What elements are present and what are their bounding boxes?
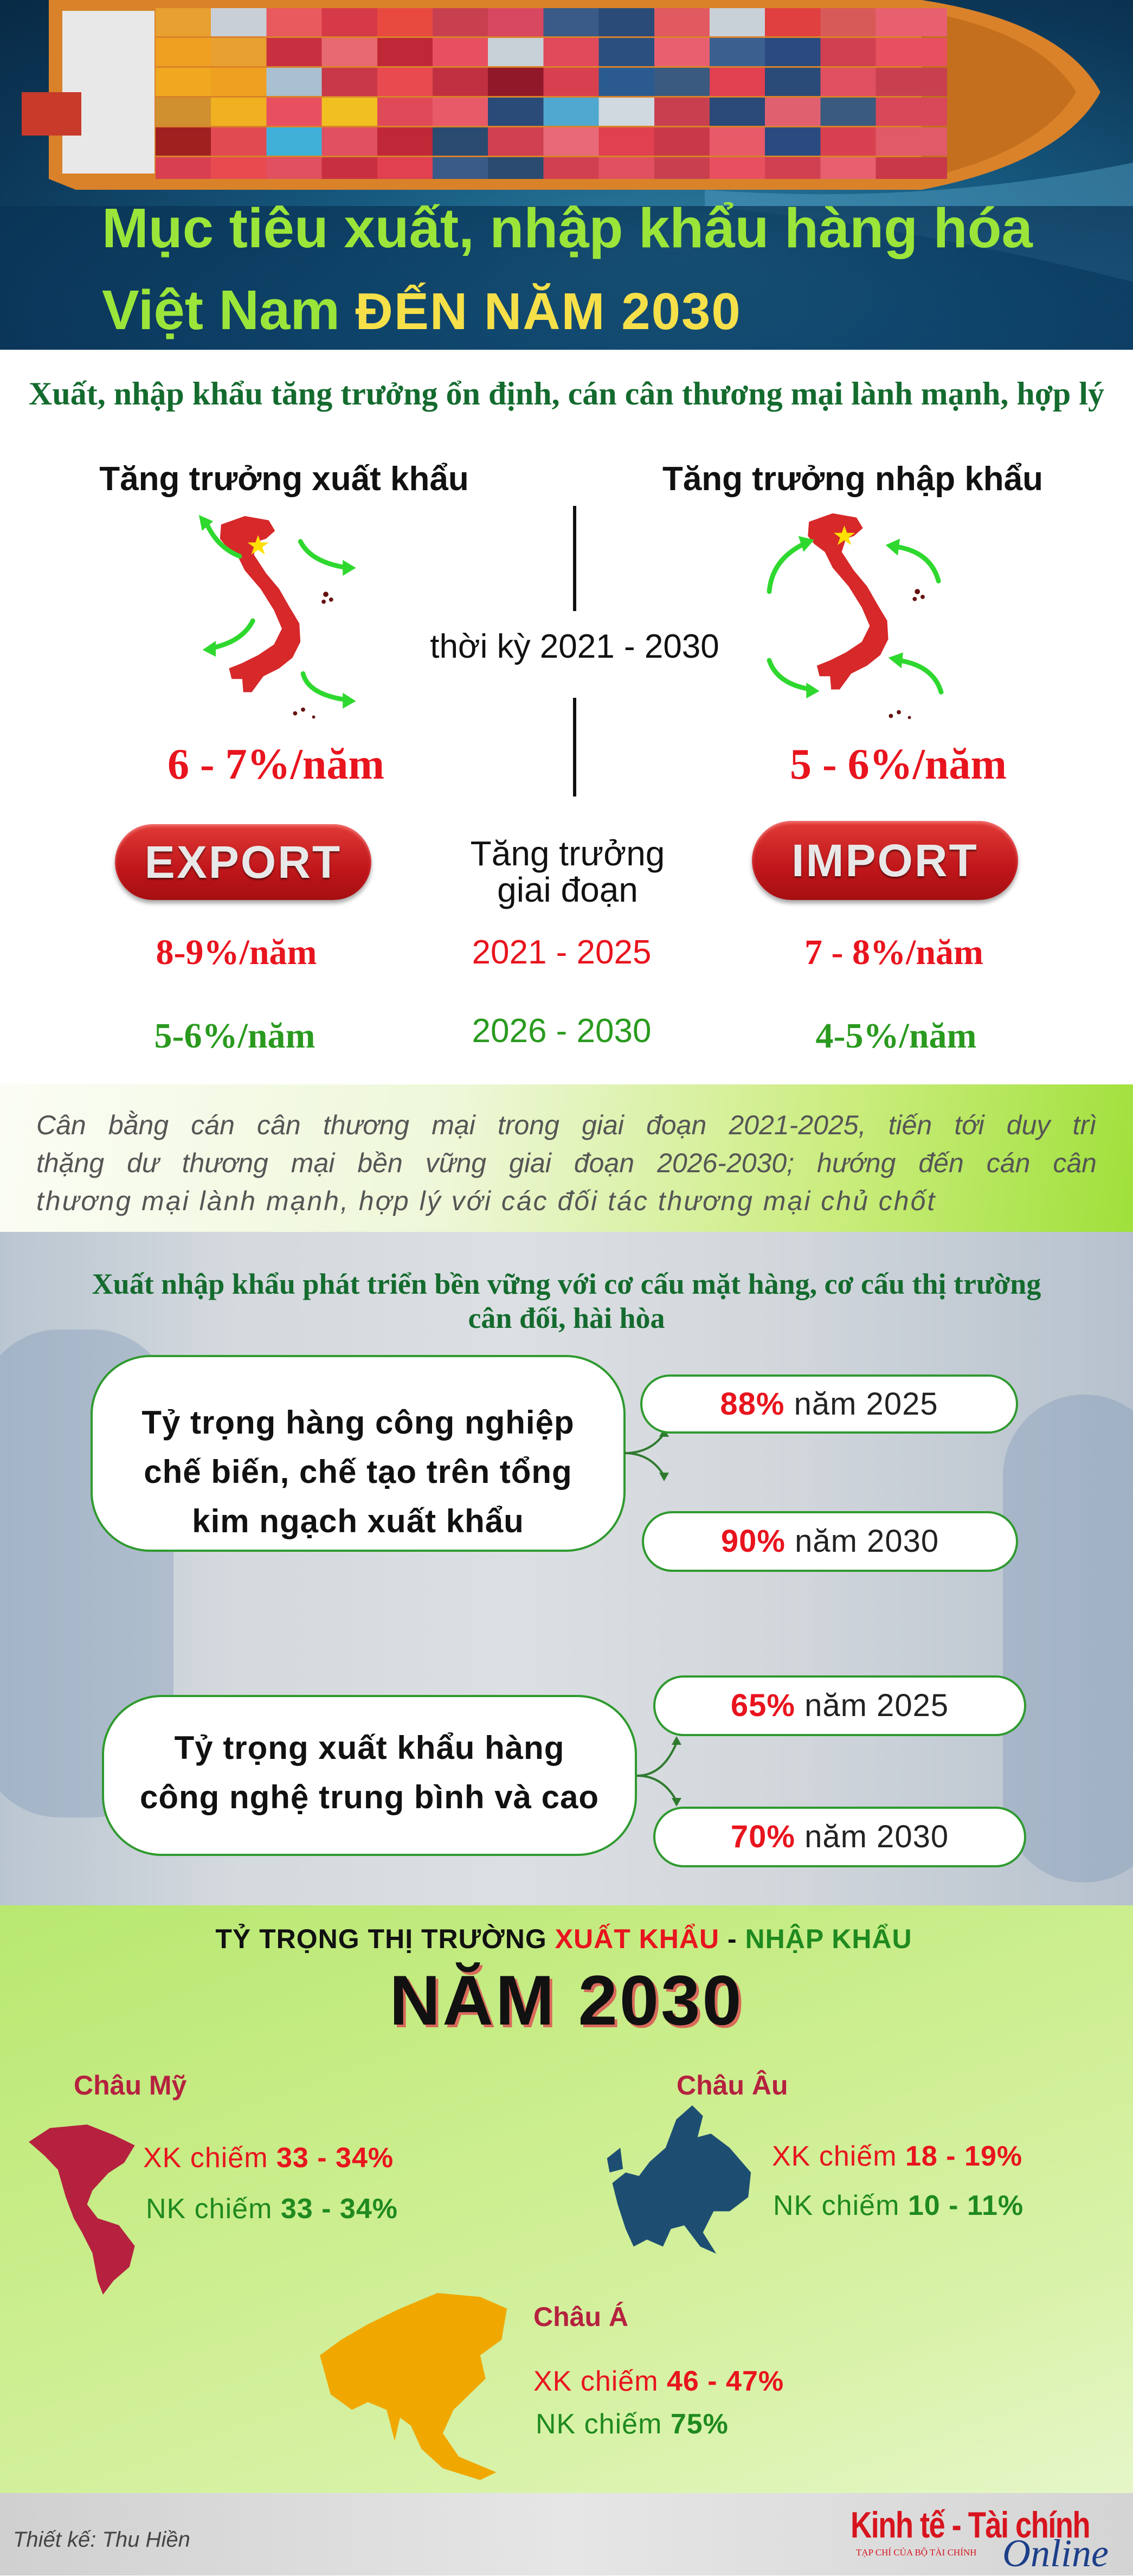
ship hull [22,0,1133,282]
logo [851,2504,1109,2575]
pill: 90%: 90% năm 2030 [721,1524,939,1559]
phase label: giai đoạn [497,870,638,909]
Asia [320,2293,784,2480]
subtitle: Xuất, nhập khẩu tăng trưởng ổn định, cán cân thương mại lành mạnh, hợp lý [29,376,1104,412]
title [102,197,1033,341]
box: processed industry share [91,1355,626,1552]
Americas [29,2070,398,2295]
phase label: Tăng trưởng [471,834,665,873]
pill: 90% [642,1511,1018,1572]
heading: cân đối, hài hòa [468,1302,665,1334]
band: trade balance text: Cân bằng cán cân thương mại trong giai đoạn 2021-2025, tiến tới duy trì [36,1110,1097,1140]
Europe: XK chiếm 18 - 19% [772,2141,1022,2172]
arrows fork 2 [637,1736,681,1807]
pill: 70%: 70% năm 2030 [731,1819,949,1854]
box: processed industry share: kim ngạch xuất khẩu [192,1503,524,1539]
divider line bottom [573,698,576,796]
credit: Thiết kế: Thu Hiền [13,2528,190,2552]
phase 2026-2030 row: 5-6%/năm [154,1016,316,1056]
pill: 88%: 88% năm 2025 [720,1386,938,1422]
heading: Xuất nhập khẩu phát triển bền vững với cơ cấu mặt hàng, cơ cấu thị trường [92,1268,1041,1300]
band: trade balance text: thương mại lành mạnh, hợp lý với các đối tác thương mại chủ chốt [36,1186,936,1216]
phase 2026-2030 row: 4-5%/năm [815,1016,977,1056]
pill: 88% [640,1374,1018,1434]
band: trade balance text [0,1084,1133,1232]
box: processed industry share: chế biến, chế tạo trên tổng [144,1454,572,1490]
pill: 65% [653,1675,1026,1736]
import rate: 5 - 6%/năm [790,741,1007,788]
button: import: IMPORT [791,835,978,886]
phase 2026-2030 row [154,1012,977,1056]
export rate: 6 - 7%/năm [168,741,384,788]
big year: NĂM 2030 [389,1961,744,2040]
box: processed industry share: Tỷ trọng hàng công nghiệp [141,1404,575,1441]
button: export [115,824,371,900]
period text: thời kỳ 2021 - 2030 [430,628,719,665]
band: trade balance text: thặng dư thương mại bền vững giai đoạn 2026-2030; hướng đến cán cân [36,1148,1097,1178]
Europe: Châu Âu [677,2070,788,2100]
icon: vietnam map import [767,513,943,719]
pill: 70% [653,1807,1026,1867]
logo: Online [1002,2532,1109,2575]
arrows fork 1 [625,1432,669,1481]
export growth heading: Tăng trưởng xuất khẩu [99,460,469,498]
footer [0,2493,1133,2575]
title: Việt Nam ĐẾN NĂM 2030 [102,279,742,341]
heading [92,1268,1041,1334]
icon: americas map [29,2124,135,2295]
logo: Kinh tế - Tài chính [851,2504,1090,2546]
Americas: Châu Mỹ [74,2070,186,2100]
icon: vietnam map export [198,515,356,719]
box: tech export share [102,1695,637,1856]
phase 2021-2025 row [156,933,983,972]
button: export: EXPORT [145,837,342,888]
box: tech export share: công nghệ trung bình và cao [140,1779,599,1815]
Asia: XK chiếm 46 - 47% [533,2366,784,2397]
Asia: Châu Á [533,2302,628,2332]
title: Mục tiêu xuất, nhập khẩu hàng hóa [102,197,1033,259]
Americas: NK chiếm 33 - 34% [146,2193,398,2225]
phase label [471,834,665,909]
panel: market share 2030 [0,1905,1133,2493]
button: import [752,821,1018,900]
header: ship image [0,0,1133,350]
phase 2021-2025 row: 8-9%/năm [156,933,317,972]
icon: europe map [607,2105,751,2253]
box: tech export share: Tỷ trọng xuất khẩu hàng [175,1730,564,1766]
pill: 65%: 65% năm 2025 [731,1688,949,1723]
Asia: NK chiếm 75% [536,2408,729,2440]
divider line top [573,506,576,611]
icon: asia map [320,2293,507,2480]
logo: TẠP CHÍ CỦA BỘ TÀI CHÍNH [856,2547,976,2558]
Europe: NK chiếm 10 - 11% [773,2190,1023,2221]
heading: TỶ TRỌNG THỊ TRƯỜNG XUẤT KHẨU - NHẬP KHẨU [215,1924,912,1954]
panel: factory structure [0,1232,1133,1905]
Americas: XK chiếm 33 - 34% [143,2142,394,2174]
phase 2026-2030 row: 2026 - 2030 [472,1012,651,1050]
phase 2021-2025 row: 2021 - 2025 [472,934,651,971]
phase 2021-2025 row: 7 - 8%/năm [804,933,983,972]
import growth heading: Tăng trưởng nhập khẩu [662,460,1043,498]
Europe [607,2070,1023,2253]
